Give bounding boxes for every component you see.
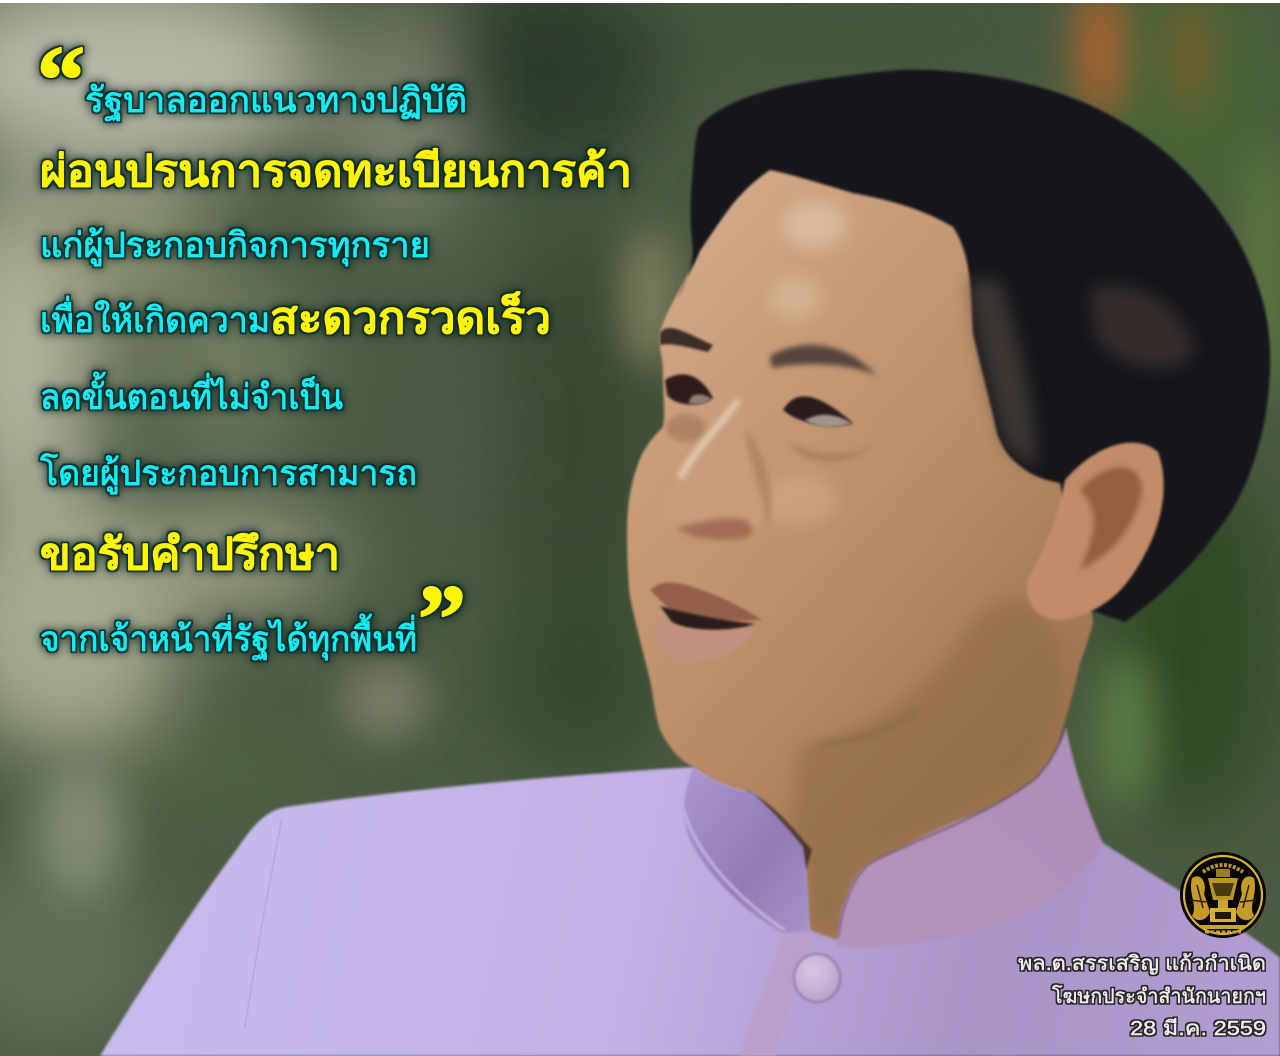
position: โฆษกประจำสำนักนายกฯ [1052, 985, 1266, 1008]
inner ear [1080, 467, 1142, 570]
mouth opening [660, 606, 755, 630]
brow highlight [769, 276, 821, 320]
name: พล.ต.สรรเสริญ แก้วกำเนิด [1018, 953, 1266, 975]
shirt body [100, 767, 1280, 1056]
eye bag [792, 444, 864, 462]
line 8: จากเจ้าหน้าที่รัฐได้ทุกพื้นที่ [40, 613, 417, 660]
shoulder seam [245, 818, 282, 1027]
line 3: แก่ผู้ประกอบกิจการทุกราย [40, 226, 430, 266]
quote text block [37, 26, 632, 672]
left eyebrow [660, 328, 713, 352]
under chin shadow [745, 790, 812, 870]
placket [740, 934, 812, 1056]
icon: government seal [1180, 852, 1266, 938]
collar left rim [684, 810, 785, 930]
button [794, 954, 840, 1002]
nose highlight [681, 402, 737, 476]
lower lip [655, 618, 758, 664]
hair temple fade [968, 280, 1036, 470]
line 5: ลดขั้นตอนที่ไม่จำเป็น [40, 371, 343, 417]
line 6: โดยผู้ประกอบการสามารถ [40, 453, 417, 494]
nostril [676, 518, 752, 540]
nose side shadow [746, 434, 772, 519]
collar right [837, 727, 1103, 948]
closing quote mark: ” [418, 565, 466, 672]
neck and jaw shading [790, 599, 1063, 930]
cheek light [771, 477, 836, 524]
line 1: รัฐบาลออกแนวทางปฏิบัติ [85, 81, 467, 121]
line 4 highlight: สะดวกรวดเร็ว [270, 291, 551, 343]
right eye [783, 396, 853, 426]
hair sheen [1090, 286, 1195, 369]
spokesperson credit [1018, 953, 1266, 1040]
left eye white [688, 394, 712, 404]
jaw crease [822, 742, 834, 745]
opening quote mark: “ [37, 26, 85, 133]
skin of face and neck [627, 160, 1093, 940]
line 7: ขอรับคำปรึกษา [40, 530, 340, 579]
left eye [665, 374, 713, 404]
upper lip [650, 582, 762, 621]
hair [677, 70, 1270, 622]
right eye white [805, 415, 852, 427]
ear [1027, 443, 1164, 620]
collar neck edge [838, 730, 1064, 938]
right eyebrow [770, 345, 877, 376]
date: 28 มี.ค. 2559 [1130, 1018, 1266, 1040]
forehead highlight [783, 201, 847, 249]
left cheek under eye [666, 414, 706, 442]
nose [708, 472, 760, 526]
line 2: ผ่อนปรนการจดทะเบียนการค้า [40, 147, 632, 196]
line 4 start: เพื่อให้เกิดความ [40, 296, 270, 340]
collar left [684, 767, 808, 933]
